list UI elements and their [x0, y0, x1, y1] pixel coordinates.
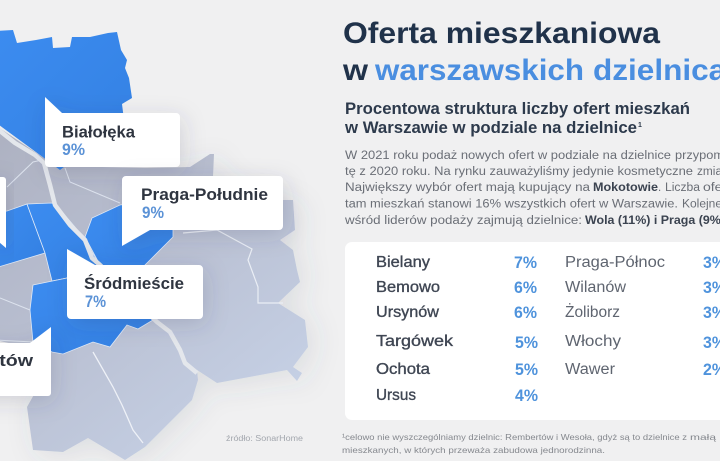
- left column percentages: 6%: [514, 304, 537, 322]
- subtitle: Procentowa struktura liczby ofert mieszkań: [345, 100, 690, 118]
- callout: Praga-Południe: [122, 176, 283, 246]
- intro text: tam mieszkań stanowi 16% wszystkich ofert w Warszawie.: [345, 198, 678, 210]
- subtitle: w Warszawie w podziale na dzielnice: [344, 119, 637, 137]
- left column names: [376, 254, 453, 404]
- callout: Białołęka: Białołęka: [62, 124, 136, 142]
- left column percentages: 4%: [515, 387, 538, 405]
- left column percentages: 6%: [514, 279, 537, 297]
- intro text: Kolejne: [682, 198, 720, 210]
- callout: Białołęka: [45, 97, 180, 167]
- left column percentages: 7%: [514, 254, 537, 272]
- left column names: Targówek: [376, 333, 453, 350]
- left column percentages: [514, 254, 538, 405]
- right column names: Żoliborz: [565, 303, 620, 321]
- river Vistula: [0, 127, 197, 373]
- left column names: Bemowo: [376, 279, 440, 296]
- intro text: Największy wybór ofert mają kupujący na: [345, 182, 591, 194]
- district borders: [0, 160, 283, 443]
- callout: offscreen left label: [0, 177, 6, 248]
- source note: źródło: SonarHome: [226, 434, 304, 443]
- callout: Mokotów: [0, 327, 51, 396]
- callout: Praga-Południe: 9%: [142, 204, 164, 222]
- intro text: tę z 2020 roku. Na rynku zauważyliśmy jedynie kosmetyczne: [345, 166, 693, 178]
- intro text: .: [658, 182, 661, 194]
- right column names: Wawer: [565, 361, 615, 378]
- right column names: Włochy: [565, 333, 621, 350]
- intro text: wśród liderów podaży zajmują dzielnice:: [344, 215, 582, 227]
- title: [342, 17, 720, 87]
- district: Wola and Ochota side: [0, 204, 45, 268]
- map base: grey districts: [0, 125, 308, 460]
- panel: district table: [345, 242, 720, 420]
- title: Oferta mieszkaniowa: [343, 17, 660, 50]
- left column names: Ochota: [376, 361, 430, 378]
- footnote: [342, 432, 720, 455]
- subtitle: 1: [638, 122, 642, 129]
- footnote: ¹celowo nie wyszczególniamy dzielnic: Rembertów i Wesoła, gdyż są to dzielnice z: [342, 432, 687, 442]
- right column names: [565, 254, 665, 378]
- title: warszawskich: [374, 54, 584, 87]
- left column names: Ursus: [376, 387, 416, 404]
- left column names: Bielany: [376, 254, 430, 271]
- callout: Śródmieście: 7%: [85, 293, 106, 311]
- map of Warsaw districts: [0, 30, 308, 460]
- district: Białołęka: [0, 30, 132, 170]
- left column percentages: 5%: [515, 361, 538, 379]
- left column names: Ursynów: [376, 304, 440, 321]
- district: Śródmieście: [27, 203, 120, 281]
- intro text: Mokotowie: [593, 182, 658, 194]
- right column percentages: [703, 254, 720, 379]
- intro text: Wola (11%) i Praga (9%): [585, 215, 720, 227]
- intro text: W 2021 roku podaż nowych ofert w podziale na dzielnice: [345, 150, 671, 162]
- right column names: Wilanów: [565, 279, 627, 296]
- district: Praga-Południe: [85, 203, 173, 285]
- callout: Praga-Południe: Praga-Południe: [141, 186, 268, 204]
- right column names: Praga-Północ: [565, 254, 665, 271]
- callout: Śródmieście: [67, 249, 203, 319]
- footnote: mieszkanych, w których przeważa zabudowa jednorodzinna.: [342, 445, 605, 455]
- subtitle: [344, 100, 690, 137]
- callout: Śródmieście: Śródmieście: [84, 274, 184, 293]
- title: w: [342, 54, 369, 87]
- intro text: [344, 150, 720, 227]
- intro text: Liczba: [665, 182, 701, 194]
- callout: Białołęka: 9%: [62, 141, 85, 159]
- left column percentages: 5%: [515, 334, 538, 352]
- district: Mokotów: [30, 270, 153, 354]
